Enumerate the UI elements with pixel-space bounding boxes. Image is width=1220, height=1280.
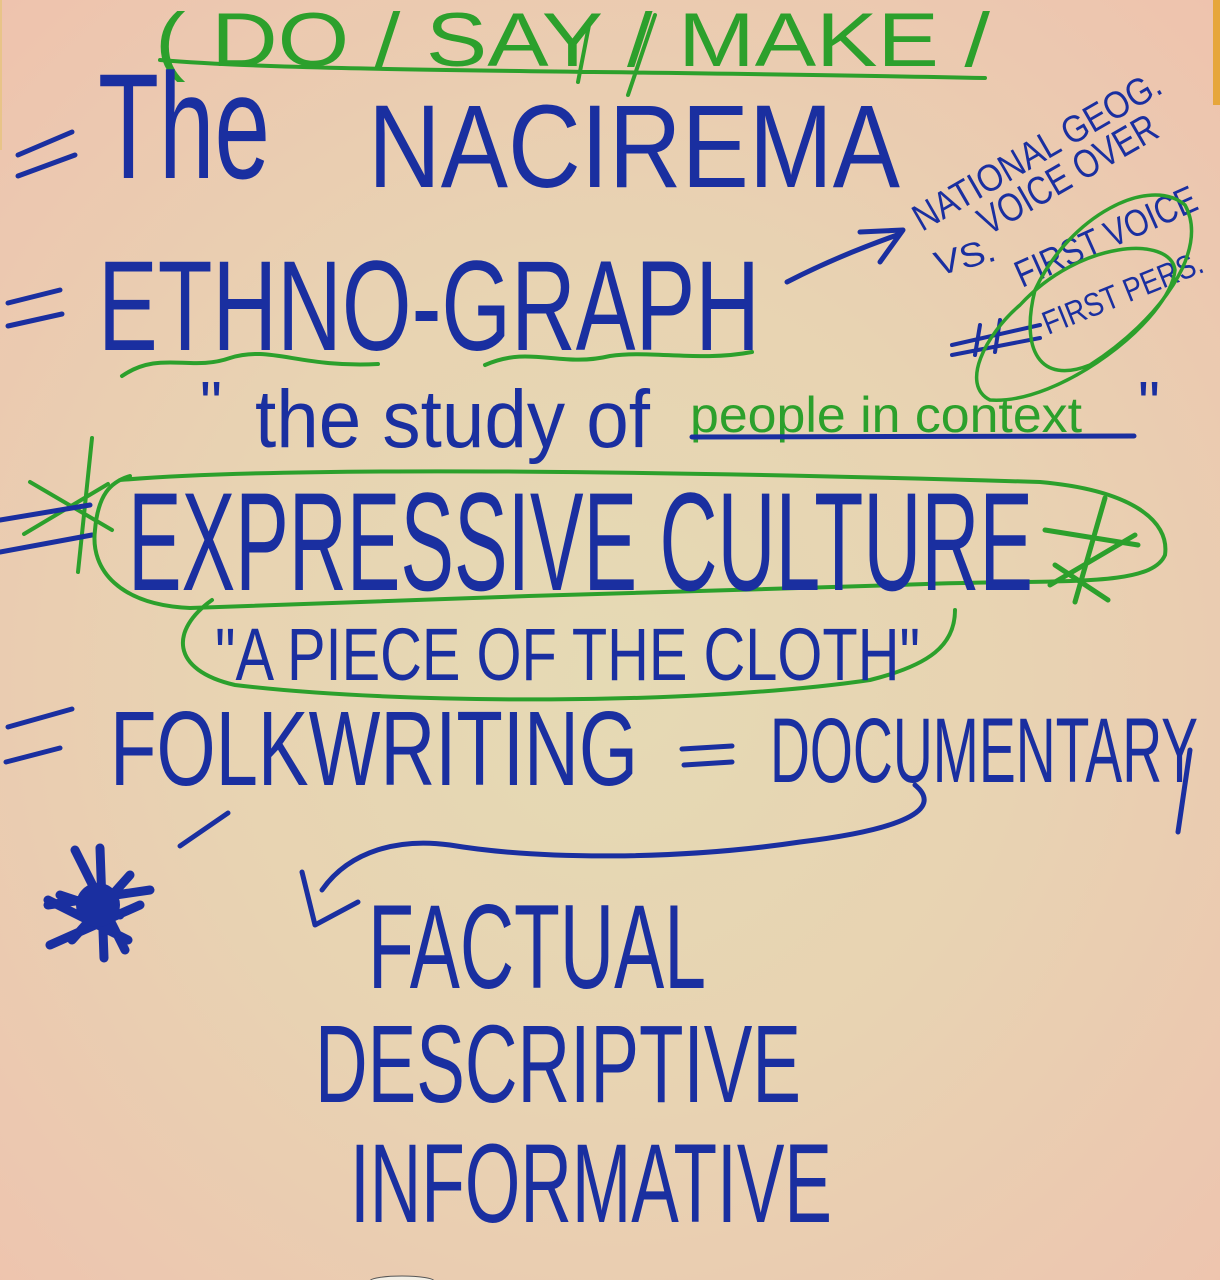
line: folkwriting = documentary [6, 690, 1198, 832]
definition: the study of people in context: " [1138, 370, 1160, 439]
a piece of the cloth callout: "A PIECE OF THE CLOTH" [215, 613, 920, 696]
green star right [1045, 498, 1138, 602]
side note: national geog voice over vs first voice: NATIONAL GEOG. [906, 63, 1169, 240]
list: factual descriptive informative: DESCRIPTIVE [315, 1003, 801, 1126]
line: the nacirema: The [98, 42, 270, 210]
arrow to side note [787, 230, 903, 282]
equals left of expressive [0, 505, 92, 552]
green star left [24, 438, 112, 572]
side note: national geog voice over vs first voice: VS. [930, 231, 1000, 284]
line: ethno-graph: ETHNO-GRAPH [98, 235, 760, 378]
side note: national geog voice over vs first voice: VOICE OVER [970, 106, 1166, 244]
side note: national geog voice over vs first voice [906, 63, 1208, 400]
line: the nacirema: NACIREMA [368, 81, 900, 213]
list: factual descriptive informative [315, 880, 832, 1246]
definition: the study of people in context: the study of [255, 374, 650, 465]
dash mark [180, 813, 228, 846]
definition: the study of people in context: " [200, 370, 222, 439]
line: folkwriting = documentary: FOLKWRITING [110, 690, 638, 808]
object at bottom edge [370, 1276, 434, 1280]
curved arrow to list [302, 785, 924, 925]
definition: the study of people in context: people in context [690, 387, 1082, 443]
list: factual descriptive informative: FACTUAL [368, 880, 706, 1014]
list: factual descriptive informative: INFORMATIVE [350, 1121, 832, 1246]
green heading: do say make: ( DO / SAY / MAKE / [155, 0, 991, 83]
scribbled star [48, 848, 150, 958]
line: the nacirema [18, 42, 900, 213]
line: ethno-graph [8, 235, 760, 378]
a piece of the cloth callout [183, 600, 955, 699]
definition: the study of people in context [200, 370, 1160, 465]
orange edge right [1213, 0, 1220, 105]
yellow edge left [0, 0, 2, 150]
